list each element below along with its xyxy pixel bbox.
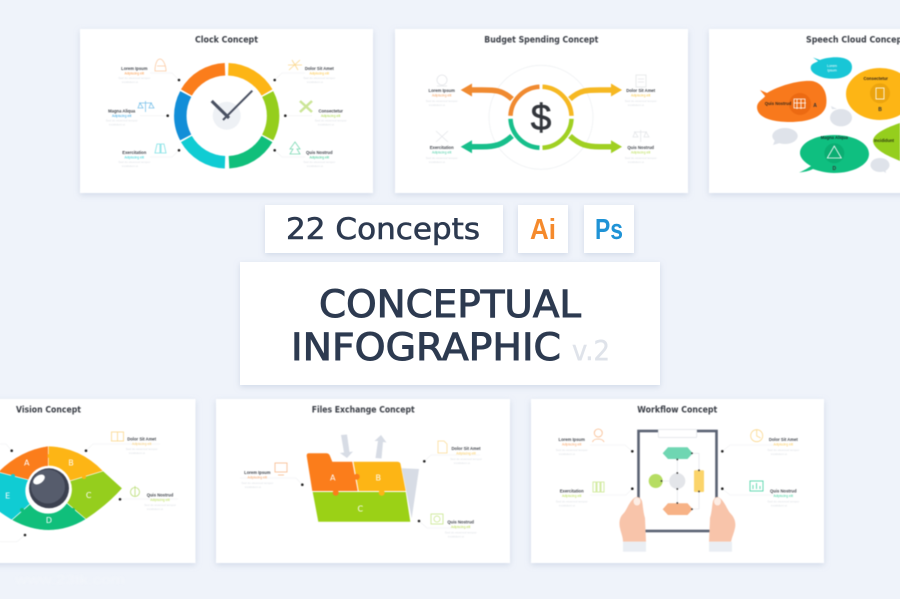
budget labels: Sed do eiusmod tempor <box>625 156 657 160</box>
puzzle knobs <box>11 454 86 512</box>
badge: Ai: Ai <box>530 214 556 246</box>
workflow labels: incididunt ut <box>771 504 787 508</box>
arrows <box>461 84 622 153</box>
clock icons <box>138 59 312 154</box>
workflow labels: Exercitation <box>560 488 584 494</box>
panel: workflow concept <box>531 399 824 563</box>
bubble: cyan: Lorem <box>827 64 837 68</box>
folder <box>307 453 419 522</box>
budget labels: incididunt ut <box>628 103 644 107</box>
puzzle letters <box>5 458 92 525</box>
budget labels <box>426 88 657 164</box>
badge: Ai <box>518 205 568 253</box>
folder: A <box>330 474 336 482</box>
bubble: yellow B: B <box>878 107 882 113</box>
vision labels: Sed do eiusmod tempor <box>144 503 176 507</box>
clock labels: incididunt ut <box>307 80 323 84</box>
workflow labels: incididunt ut <box>559 504 575 508</box>
clipboard <box>638 430 716 531</box>
workflow labels: Sed do eiusmod tempor <box>556 448 588 452</box>
clock labels: Lorem Ipsum <box>121 66 148 71</box>
files labels: Sed do eiusmod tempor <box>450 457 482 461</box>
files labels: Dolor Sit Amet <box>452 446 481 451</box>
bubble: green D: Magna Aliqua <box>821 135 848 140</box>
bubble: orange A: A <box>813 103 817 109</box>
files labels: incididunt ut <box>245 485 261 489</box>
files labels <box>241 446 482 538</box>
bubble: green D: D <box>832 166 836 172</box>
budget icons <box>436 75 649 142</box>
grey bubbles <box>772 106 890 173</box>
vision labels: Adipiscing elit <box>150 498 170 502</box>
budget labels: Sed do eiusmod tempor <box>426 156 458 160</box>
budget labels: Adipiscing elit <box>432 150 452 154</box>
files labels: Lorem Ipsum <box>244 470 271 475</box>
badge: Ps <box>584 205 634 253</box>
clock labels: Adipiscing elit <box>310 72 329 76</box>
files labels: incididunt ut <box>448 534 464 538</box>
panel: main title <box>240 262 660 385</box>
icon: dollar sign: $ <box>531 97 551 138</box>
budget labels: Sed do eiusmod tempor <box>625 99 657 103</box>
files labels: Adipiscing elit <box>456 452 476 456</box>
clock labels: Sed do eiusmod tempor <box>303 76 335 80</box>
chart: segmented money ring <box>510 87 572 148</box>
panel: speech cloud concept <box>709 29 900 193</box>
files labels: Quis Nostrud <box>447 520 474 524</box>
heading: vision concept: Vision Concept <box>16 406 81 416</box>
bubble: lime <box>873 123 900 161</box>
vision labels <box>126 436 176 511</box>
clock labels: Adipiscing elit <box>310 156 329 160</box>
bubble: cyan: Ipsum <box>827 68 837 72</box>
bubble: orange A: Quis Nostrud <box>765 101 792 106</box>
title line 1: CONCEPTUAL <box>319 283 581 326</box>
workflow diagram <box>649 447 704 515</box>
workflow labels: Sed do eiusmod tempor <box>767 500 799 504</box>
bubble: green D <box>799 135 869 173</box>
panel: clock concept <box>80 29 373 193</box>
budget labels: Adipiscing elit <box>631 94 651 98</box>
clock labels: incididunt ut <box>307 164 323 168</box>
budget labels: Adipiscing elit <box>631 150 651 154</box>
budget labels: Quis Nostrud <box>627 145 654 150</box>
files labels: Adipiscing elit <box>248 476 267 480</box>
clock labels: Sed do eiusmod tempor <box>303 160 335 164</box>
workflow labels: Adipiscing elit <box>562 442 582 446</box>
workflow labels: Adipiscing elit <box>774 442 793 446</box>
workflow labels <box>556 437 799 508</box>
budget labels: incididunt ut <box>429 160 445 164</box>
clock labels: Sed do eiusmod tempor <box>106 118 138 122</box>
clock labels: incididunt ut <box>318 122 334 126</box>
panel: files exchange concept <box>216 399 510 563</box>
budget labels: incididunt ut <box>628 160 644 164</box>
puzzle letters: E <box>5 492 10 500</box>
workflow labels: Adipiscing elit <box>562 494 582 498</box>
budget labels: Lorem Ipsum <box>429 88 455 93</box>
clock labels: Adipiscing elit <box>112 114 132 118</box>
chart: eye puzzle <box>0 446 122 530</box>
clock labels: Dolor Sit Amet <box>305 66 334 71</box>
clock labels: Exercitation <box>122 150 147 155</box>
title line 2: INFOGRAPHIC <box>291 326 561 369</box>
clock labels: Adipiscing elit <box>125 72 144 76</box>
clock labels: Quis Nostrud <box>306 150 333 155</box>
vision labels: Dolor Sit Amet <box>127 436 157 442</box>
clock labels: incididunt ut <box>122 80 138 84</box>
files labels: Sed do eiusmod tempor <box>241 481 273 485</box>
version tag: v.2 <box>572 334 610 367</box>
files labels: Sed do eiusmod tempor <box>445 530 477 534</box>
clock labels <box>106 66 347 168</box>
workflow labels: Sed do eiusmod tempor <box>767 448 799 452</box>
puzzle letters: B <box>68 458 74 468</box>
budget labels: Sed do eiusmod tempor <box>426 99 458 103</box>
puzzle letters: C <box>86 491 92 500</box>
heading: budget spending concept: Budget Spending Concept <box>484 36 598 46</box>
workflow icons <box>592 429 763 492</box>
clock labels: Adipiscing elit <box>125 156 144 160</box>
bubble: cyan <box>811 57 852 79</box>
badge: 22 concepts: 22 Concepts <box>286 212 480 246</box>
vision labels: incididunt ut <box>147 507 163 511</box>
watermark: www.23tk.com <box>14 572 125 587</box>
files icons <box>275 441 447 524</box>
clock labels: Sed do eiusmod tempor <box>118 76 150 80</box>
folder: C <box>358 504 364 514</box>
clock labels: Consectetur <box>318 108 343 114</box>
vision icons <box>112 432 140 496</box>
clock labels: Sed do eiusmod tempor <box>118 160 150 164</box>
workflow labels: incididunt ut <box>559 452 575 456</box>
budget labels: Exercitation <box>430 145 454 150</box>
bubble: yellow B: Consectetur <box>863 76 888 81</box>
clock hands <box>212 91 252 130</box>
vision labels: Sed do eiusmod tempor <box>126 447 158 451</box>
bubble: orange A <box>757 81 826 122</box>
budget labels: Dolor Sit Amet <box>626 88 656 93</box>
workflow labels: Dolor Sit Amet <box>769 437 798 442</box>
folder: B <box>376 474 381 482</box>
clock labels: incididunt ut <box>122 164 138 168</box>
workflow labels: Adipiscing elit <box>774 494 793 498</box>
bubble: lime: Incididunt <box>874 138 895 143</box>
bubble: yellow B <box>846 68 900 120</box>
heading: files exchange concept: Files Exchange Concept <box>312 406 415 416</box>
workflow labels: Sed do eiusmod tempor <box>556 500 588 504</box>
arrows: exchange <box>340 434 386 458</box>
files labels: Adipiscing elit <box>451 525 471 529</box>
clock labels: Adipiscing elit <box>321 114 341 118</box>
vision labels: Adipiscing elit <box>132 442 152 446</box>
badge: Ps: Ps <box>595 214 623 246</box>
chart: clock ring <box>180 69 273 162</box>
eye pupil <box>27 466 71 510</box>
vision labels: Quis Nostrud <box>147 492 174 498</box>
clock labels: Sed do eiusmod tempor <box>315 118 347 122</box>
clock labels: incididunt ut <box>109 122 125 126</box>
heading: workflow concept: Workflow Concept <box>637 406 717 416</box>
panel: vision concept <box>0 399 196 563</box>
badge: 22 concepts <box>265 205 503 253</box>
workflow labels: Lorem Ipsum <box>559 437 585 442</box>
panel: budget spending concept <box>395 29 688 193</box>
workflow labels: Quis Nostrud <box>770 488 797 494</box>
hands <box>619 497 735 552</box>
vision labels: incididunt ut <box>129 451 145 455</box>
puzzle letters: D <box>46 516 52 525</box>
workflow labels: incididunt ut <box>771 452 787 456</box>
budget labels: Adipiscing elit <box>432 94 452 98</box>
files labels: incididunt ut <box>454 461 470 465</box>
budget labels: incididunt ut <box>429 103 445 107</box>
puzzle letters: A <box>24 458 30 468</box>
clock labels: Magna Aliqua <box>108 108 136 114</box>
heading: clock concept: Clock Concept <box>195 36 258 46</box>
